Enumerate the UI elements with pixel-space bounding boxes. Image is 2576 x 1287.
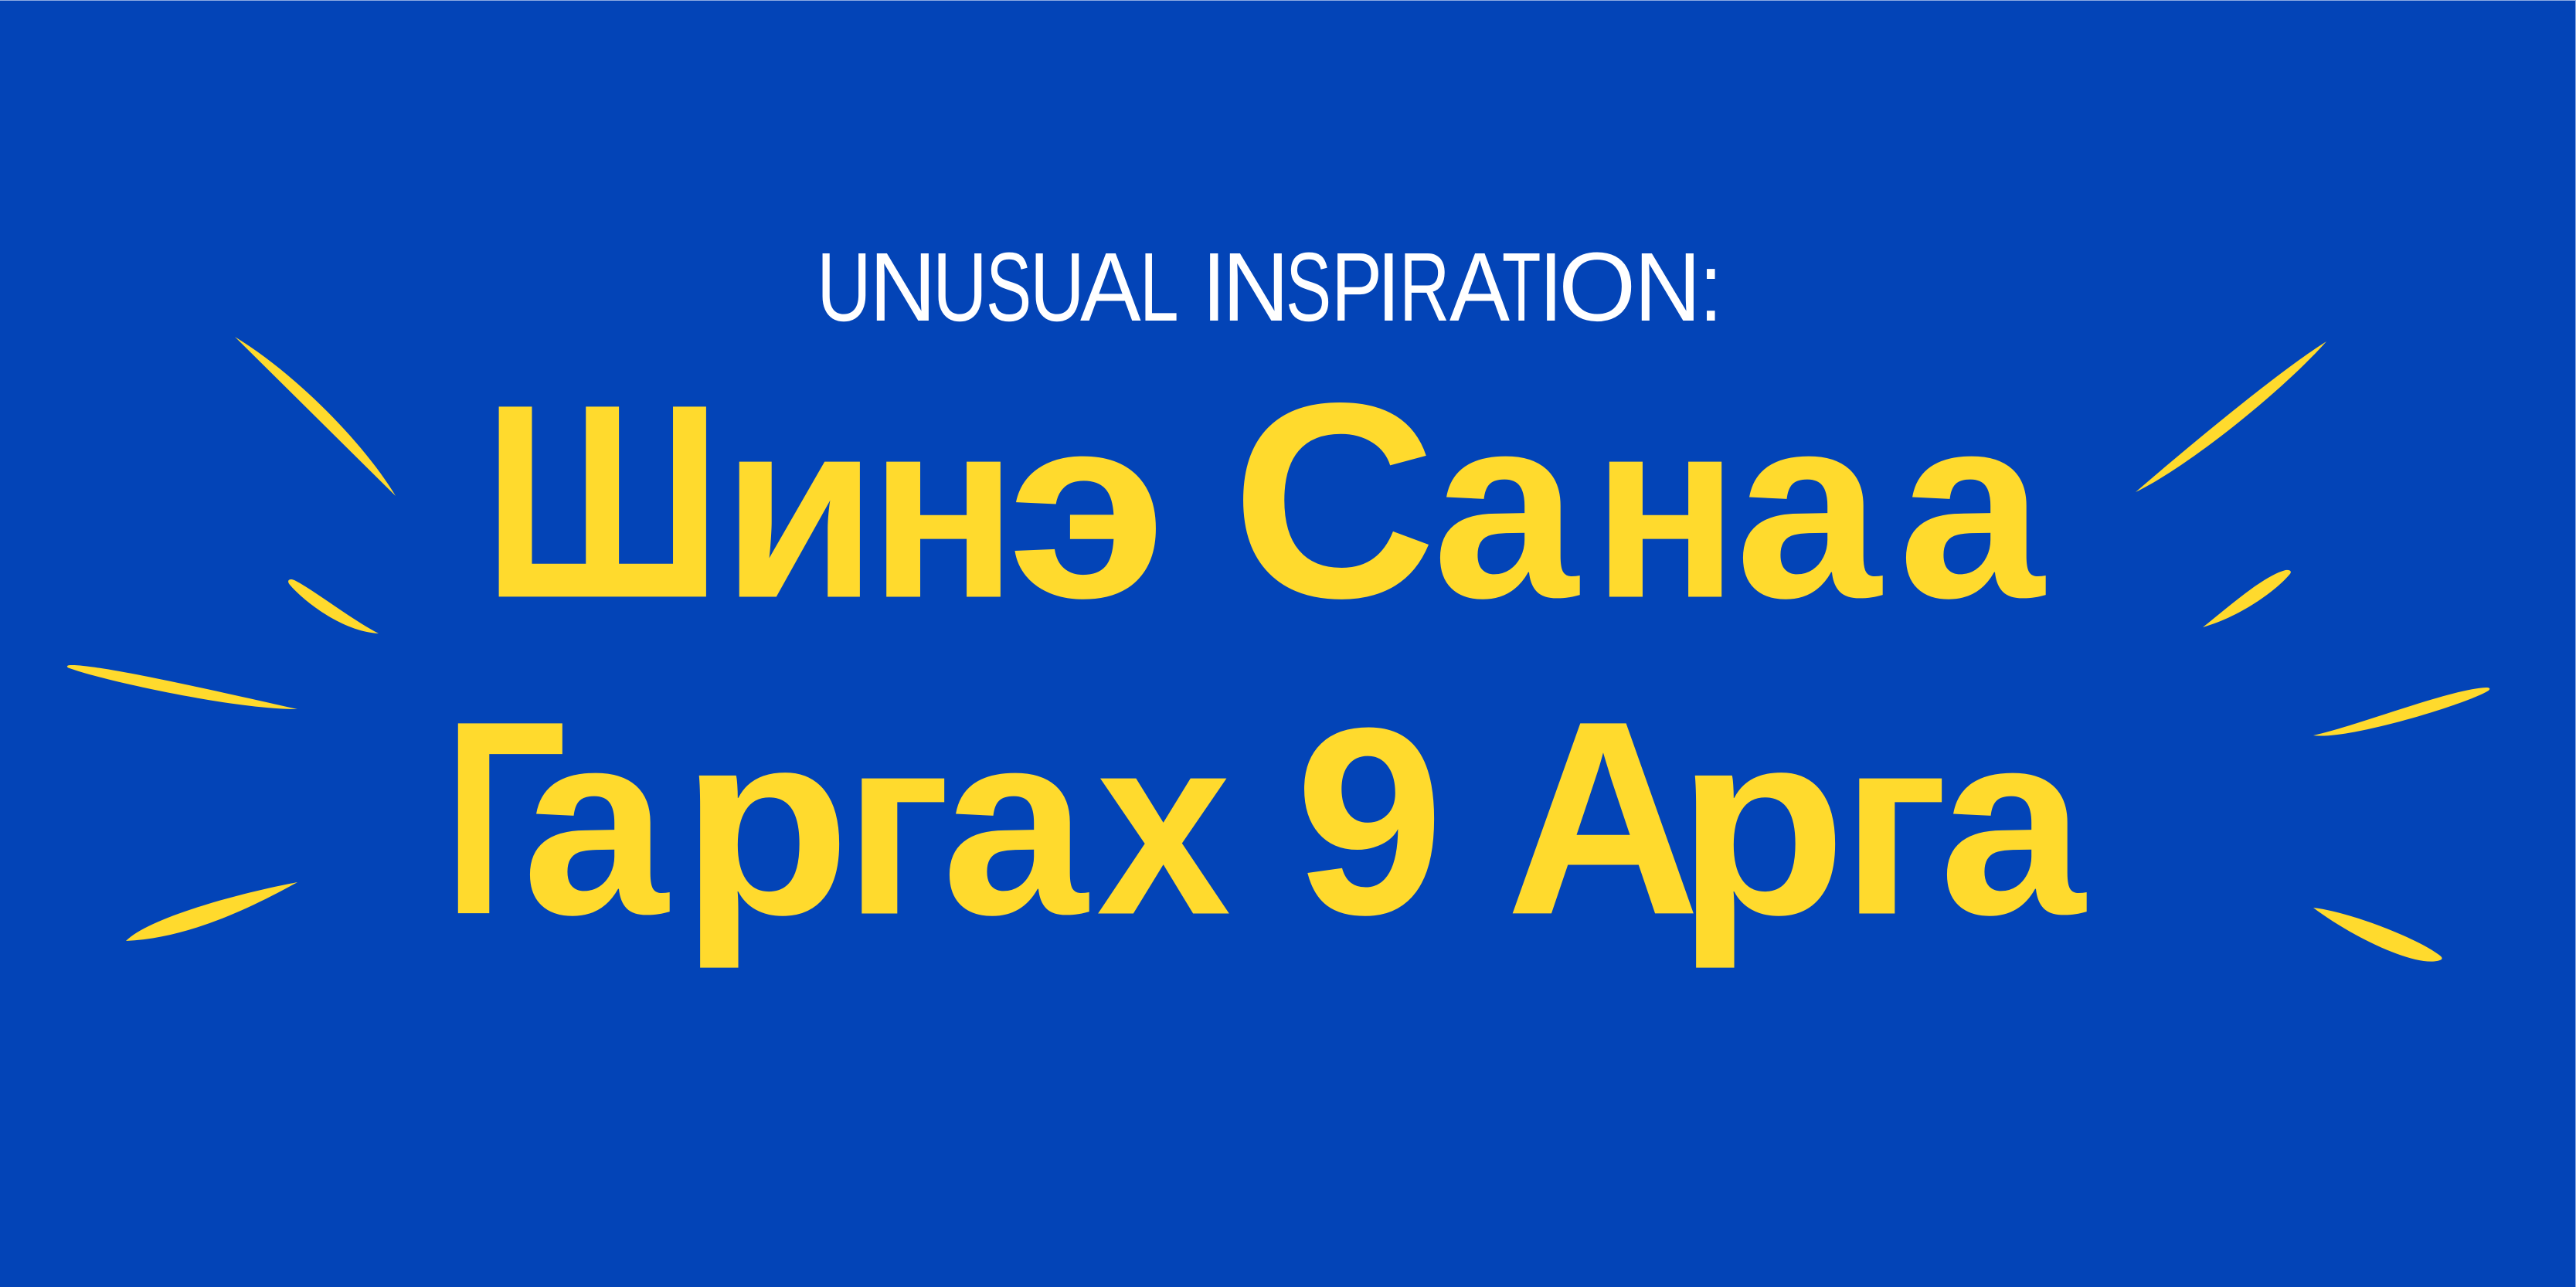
heading: Unusual Inspiration: N — [1222, 233, 1290, 342]
spark: left 2 — [288, 579, 379, 633]
title line 2: Гаргах 9 Арга: а — [522, 678, 668, 971]
heading: Unusual Inspiration: P — [1331, 233, 1382, 342]
heading: Unusual Inspiration: T — [1502, 233, 1541, 342]
title line 2: Гаргах 9 Арга: г — [844, 683, 951, 969]
spark: right 1 — [2136, 341, 2326, 492]
title line 2: Гаргах 9 Арга: р — [681, 678, 851, 971]
heading: Unusual Inspiration: A — [1080, 233, 1141, 342]
heading: Unusual Inspiration: U — [933, 233, 987, 342]
heading: Unusual Inspiration: I — [1539, 233, 1563, 342]
heading: Unusual Inspiration: I — [1377, 233, 1401, 342]
title line 2: Гаргах 9 Арга: р — [1677, 678, 1847, 971]
heading: Unusual Inspiration: N — [1634, 233, 1701, 342]
heading: Unusual Inspiration: I — [1202, 233, 1226, 342]
heading: Unusual Inspiration: S — [1286, 233, 1331, 342]
heading: Unusual Inspiration: N — [869, 233, 936, 342]
title line 1: Шинэ Санаа: а — [1735, 362, 1881, 654]
heading: Unusual Inspiration: S — [986, 233, 1031, 342]
heading: Unusual Inspiration: : — [1699, 233, 1723, 342]
spark: left 1 — [235, 337, 396, 496]
heading: Unusual Inspiration: U — [817, 233, 872, 342]
title line 1: Шинэ Санаа: а — [1432, 362, 1579, 654]
title line 1: Шинэ Санаа — [483, 346, 2046, 657]
heading: Unusual Inspiration: U — [1030, 233, 1085, 342]
heading: Unusual Inspiration — [817, 233, 1723, 342]
heading: Unusual Inspiration: R — [1399, 233, 1449, 342]
title line 2: Гаргах 9 Арга: а — [1939, 678, 2085, 971]
title line 1: Шинэ Санаа: н — [869, 366, 1018, 653]
title line 2: Гаргах 9 Арга: А — [1506, 664, 1701, 974]
spark: right 4 — [2313, 908, 2442, 962]
spark: right 3 — [2313, 688, 2489, 736]
title line 2: Гаргах 9 Арга: Г — [443, 664, 567, 974]
heading: Unusual Inspiration: A — [1449, 233, 1510, 342]
title line 2: Гаргах 9 Арга: г — [1841, 683, 1949, 969]
spark: right 2 — [2203, 570, 2291, 627]
title line 1: Шинэ Санаа: э — [1008, 362, 1167, 654]
title line 2: Гаргах 9 Арга: а — [942, 678, 1088, 971]
title line 2: Гаргах 9 Арга: 9 — [1295, 674, 1444, 973]
title line 2: Гаргах 9 Арга — [443, 664, 2087, 974]
title line 1: Шинэ Санаа: н — [1592, 366, 1738, 653]
heading: Unusual Inspiration: L — [1140, 233, 1179, 342]
title line 1: Шинэ Санаа: С — [1232, 346, 1436, 657]
spark: left 4 — [126, 882, 297, 941]
spark: left 3 — [67, 665, 297, 709]
title line 1: Шинэ Санаа: а — [1898, 362, 2044, 654]
title line 1: Шинэ Санаа: и — [722, 366, 878, 653]
title line 2: Гаргах 9 Арга: х — [1096, 683, 1231, 969]
title line 1: Шинэ Санаа: Ш — [483, 348, 722, 657]
heading: Unusual Inspiration: O — [1558, 233, 1636, 342]
